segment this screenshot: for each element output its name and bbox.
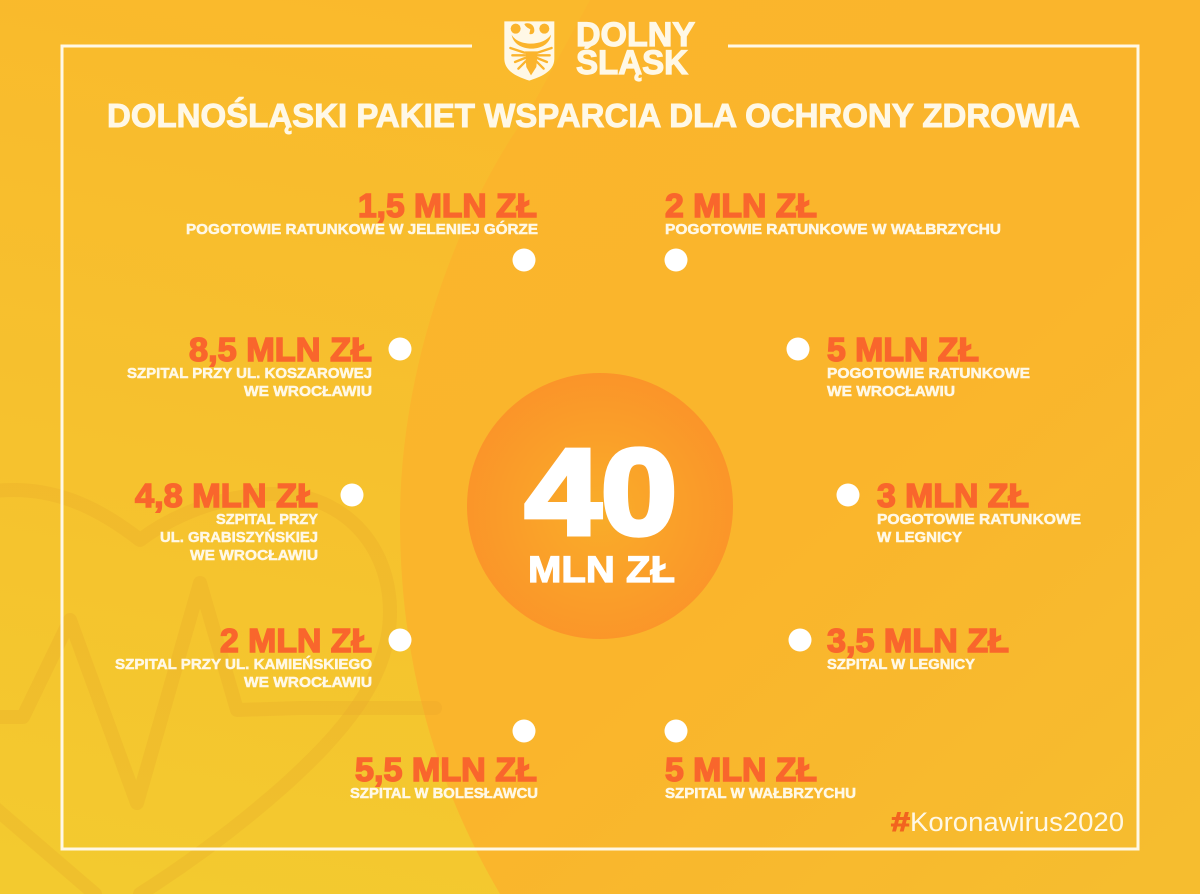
title: DOLNOŚLĄSKI PAKIET WSPARCIA DLA OCHRONY ZDROWIA	[107, 97, 1080, 134]
item: Pogotowie Wrocław: POGOTOWIE RATUNKOWE	[827, 366, 1030, 382]
logo wordmark: ŚLĄSK	[576, 44, 688, 82]
item: Pogotowie Wrocław: 5 MLN ZŁ	[827, 331, 979, 368]
item: Szpital Grabiszyńska: WE WROCŁAWIU	[190, 548, 318, 564]
item: Szpital Legnica: SZPITAL W LEGNICY	[827, 657, 975, 673]
total unit: MLN ZŁ	[528, 549, 675, 590]
item: Szpital Kamieńskiego	[115, 622, 412, 691]
item: Pogotowie Wałbrzych	[664, 187, 1001, 272]
item: Szpital Bolesławiec	[350, 720, 538, 802]
item: Pogotowie Legnica: W LEGNICY	[877, 530, 962, 546]
item: Szpital Koszarowa: WE WROCŁAWIU	[244, 384, 372, 400]
item: Pogotowie Wrocław: WE WROCŁAWIU	[827, 384, 955, 400]
total amount: 40	[525, 424, 677, 560]
hashtag: #	[891, 807, 910, 837]
item: Szpital Legnica	[788, 622, 1009, 673]
item: Szpital Grabiszyńska: 4,8 MLN ZŁ	[135, 477, 318, 514]
item: Szpital Grabiszyńska: UL. GRABISZYŃSKIEJ	[160, 529, 318, 546]
item: Pogotowie Jelenia Góra: 1,5 MLN ZŁ	[358, 187, 537, 224]
item: Pogotowie Jelenia Góra: POGOTOWIE RATUNKOWE W JELENIEJ GÓRZE	[186, 220, 538, 238]
item: Szpital Kamieńskiego: WE WROCŁAWIU	[244, 675, 372, 691]
logo wordmark	[576, 16, 695, 82]
item: Szpital Grabiszyńska: SZPITAL PRZY	[216, 512, 318, 528]
item: Pogotowie Wałbrzych: POGOTOWIE RATUNKOWE W WAŁBRZYCHU	[665, 222, 1001, 238]
item: Pogotowie Legnica: 3 MLN ZŁ	[877, 477, 1029, 514]
item: Szpital Kamieńskiego: 2 MLN ZŁ	[220, 622, 372, 659]
icon: coat of arms shield	[504, 21, 554, 81]
hashtag: Koronawirus2020	[910, 807, 1124, 837]
item: Pogotowie Wałbrzych: 2 MLN ZŁ	[665, 187, 817, 224]
item: Szpital Koszarowa	[127, 331, 412, 400]
item: Szpital Bolesławiec: SZPITAL W BOLESŁAWCU	[350, 786, 538, 802]
background orange shape	[400, 0, 1200, 894]
item: Pogotowie Wrocław	[786, 331, 1030, 400]
item: Pogotowie Legnica: POGOTOWIE RATUNKOWE	[877, 512, 1081, 528]
item: Szpital Wałbrzych: 5 MLN ZŁ	[665, 751, 817, 788]
background heart with pulse line	[0, 490, 435, 894]
item: Szpital Koszarowa: 8,5 MLN ZŁ	[189, 331, 372, 368]
central circle: total	[467, 373, 733, 639]
item: Pogotowie Legnica	[836, 477, 1081, 546]
item: Pogotowie Jelenia Góra	[186, 187, 538, 272]
logo wordmark: DOLNY	[576, 16, 695, 54]
item: Szpital Wałbrzych: SZPITAL W WAŁBRZYCHU	[665, 786, 856, 802]
item: Szpital Grabiszyńska	[135, 477, 364, 564]
logo: Dolny Śląsk	[504, 16, 695, 82]
item: Szpital Koszarowa: SZPITAL PRZY UL. KOSZAROWEJ	[127, 366, 372, 382]
item: Szpital Wałbrzych	[664, 720, 856, 802]
item: Szpital Legnica: 3,5 MLN ZŁ	[827, 622, 1009, 659]
item: Szpital Bolesławiec: 5,5 MLN ZŁ	[355, 751, 537, 788]
item: Szpital Kamieńskiego: SZPITAL PRZY UL. KAMIEŃSKIEGO	[115, 656, 372, 673]
